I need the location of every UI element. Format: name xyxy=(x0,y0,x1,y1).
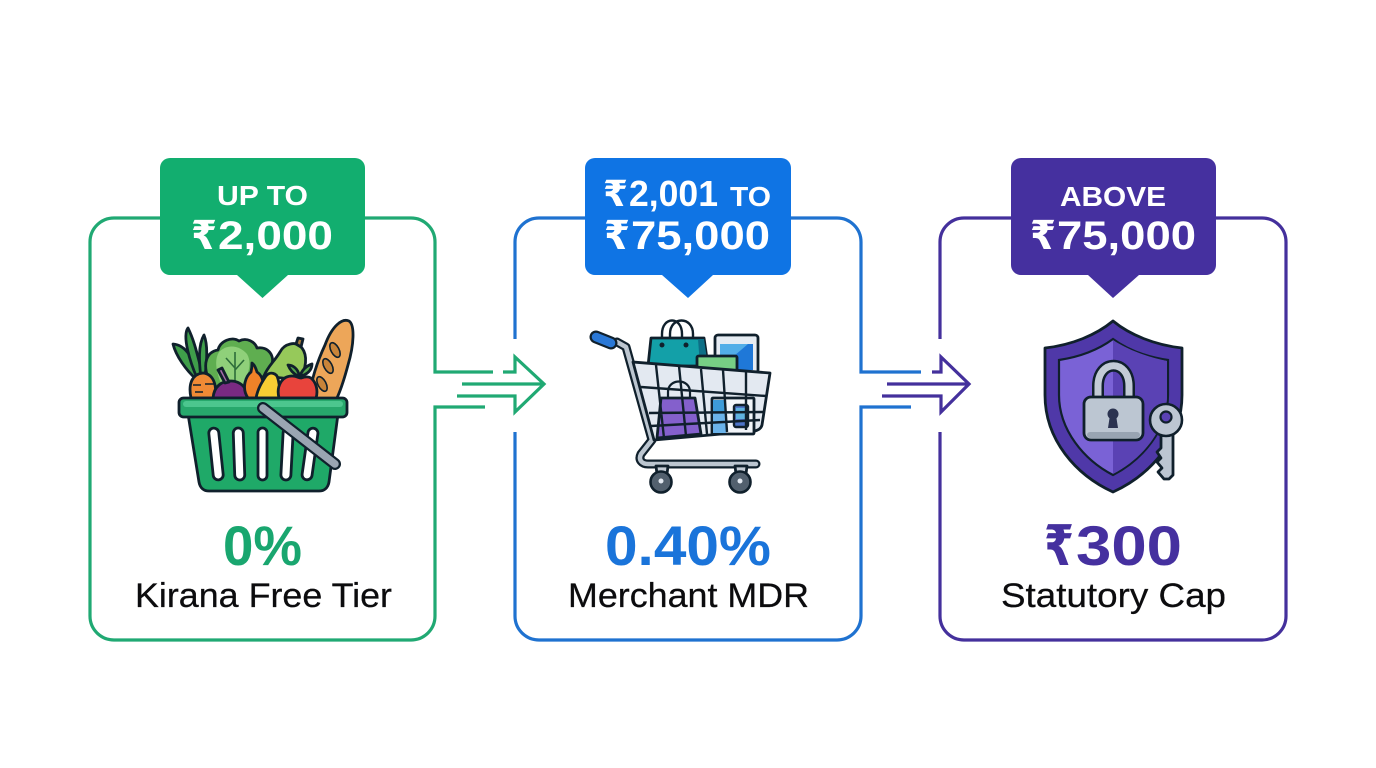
range tag: 2,001 to 75,000: TO xyxy=(730,181,771,212)
green box xyxy=(697,356,737,372)
cart frame xyxy=(617,342,756,464)
carrot greens xyxy=(173,328,207,379)
basket slots xyxy=(208,428,319,480)
range tag: up to 2,000: UP TO xyxy=(217,180,308,211)
value: 300 rupees: 300 xyxy=(1076,514,1182,577)
range tag: 2,001 to 75,000 xyxy=(585,158,791,298)
range tag: above 75,000: ₹ xyxy=(1030,214,1056,258)
range tag: up to 2,000: 2,000 xyxy=(218,214,333,258)
cart handle grip xyxy=(596,337,611,343)
padlock xyxy=(1084,366,1143,440)
carrot xyxy=(190,373,216,398)
basket rim xyxy=(179,398,347,417)
teal shopping bag xyxy=(648,320,708,366)
wheels xyxy=(650,466,750,492)
range tag: 2,001 to 75,000: ₹ xyxy=(603,173,628,214)
cart grid xyxy=(641,365,766,438)
onion xyxy=(245,363,263,398)
basket handle xyxy=(263,408,335,464)
range tag: above 75,000: 75,000 xyxy=(1057,214,1196,258)
basket body xyxy=(188,414,338,491)
pear xyxy=(264,344,306,380)
label: Statutory Cap: Statutory Cap xyxy=(1001,577,1226,615)
tablet xyxy=(715,335,758,373)
range tag: 2,001 to 75,000: 75,000 xyxy=(631,214,770,258)
arrow: purple, second to third tier xyxy=(882,357,969,412)
panel border: green xyxy=(90,218,493,640)
yellow pepper xyxy=(256,373,280,398)
range tag: above 75,000: ABOVE xyxy=(1060,181,1166,212)
icon: shopping cart xyxy=(596,320,770,492)
boxed items xyxy=(712,398,754,434)
panel border: blue xyxy=(515,218,921,640)
panel: 2,001 to 75,000 tier xyxy=(515,158,921,640)
shield inner xyxy=(1059,339,1168,475)
purple bag xyxy=(657,382,701,438)
baguette xyxy=(310,320,353,400)
range tag: above 75,000 xyxy=(1011,158,1216,298)
label: Kirana Free Tier: Kirana Free Tier xyxy=(135,577,392,615)
lettuce xyxy=(206,339,273,388)
cart basket xyxy=(633,362,770,440)
range tag: up to 2,000 xyxy=(160,158,365,298)
panel: above 75,000 tier xyxy=(940,158,1286,640)
icon: shield with lock and key xyxy=(1045,321,1182,492)
range tag: 2,001 to 75,000: 2,001 xyxy=(629,173,718,214)
beet xyxy=(213,381,248,398)
key xyxy=(1150,404,1182,479)
icon: grocery basket xyxy=(173,320,353,491)
value: 0.40%: 0.40% xyxy=(605,514,771,577)
shield outer xyxy=(1045,321,1182,492)
value: 300 rupees: ₹ xyxy=(1044,514,1074,577)
panel: up to 2,000 tier xyxy=(90,158,493,640)
value: 0%: 0% xyxy=(223,514,302,577)
range tag: 2,001 to 75,000: ₹ xyxy=(604,214,630,258)
panel border: purple xyxy=(940,218,1286,640)
apple xyxy=(278,376,317,398)
range tag: up to 2,000: ₹ xyxy=(191,214,217,258)
label: Merchant MDR: Merchant MDR xyxy=(568,577,809,615)
arrow: green, first to second tier xyxy=(457,357,544,412)
